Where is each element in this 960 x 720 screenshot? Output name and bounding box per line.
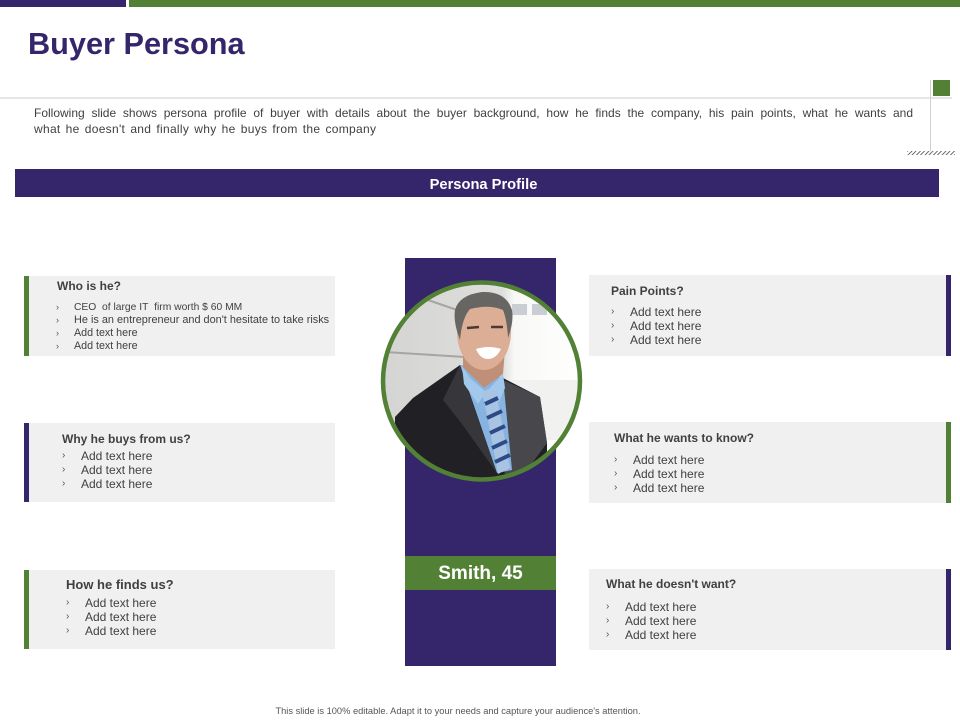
list: what he doesn't want: › <box>606 615 609 626</box>
list: pain points: Add text here <box>630 333 701 347</box>
corner accent: hatching <box>907 151 955 155</box>
description text <box>34 106 913 136</box>
list: who is he: › <box>56 302 59 312</box>
list: why he buys: › <box>62 464 65 475</box>
smile <box>476 347 501 359</box>
list: who is he: He is an entrepreneur and don't hesitate to take risks <box>74 314 329 326</box>
description text: Following slide shows persona profile of buyer with details about the buyer background, how he finds the company, his pain points, what he wants and <box>34 106 913 120</box>
list: who is he: › <box>56 328 59 338</box>
list: why he buys: › <box>62 478 65 489</box>
footer note: This slide is 100% editable. Adapt it to your needs and capture your audience's attention. <box>275 706 641 716</box>
section header: Persona Profile: Persona Profile <box>430 177 537 193</box>
panel: why he buys from us: Why he buys from us? <box>62 432 191 446</box>
list: why he buys: Add text here <box>81 463 152 477</box>
list: what he doesn't want: › <box>606 601 609 612</box>
list: who is he: Add text here <box>74 327 138 339</box>
list: how he finds us: › <box>66 625 69 636</box>
list: what he wants to know: Add text here <box>633 481 704 495</box>
list: pain points: › <box>611 306 614 317</box>
list: what he doesn't want <box>606 600 696 642</box>
eyes <box>467 327 503 328</box>
corner accent: green square <box>933 80 950 96</box>
list: who is he <box>56 302 329 352</box>
neck <box>463 356 504 388</box>
panel: what he wants to know: What he wants to know? <box>614 431 754 445</box>
list: pain points: › <box>611 320 614 331</box>
top bar: purple segment <box>0 0 126 7</box>
title: Buyer Persona <box>28 26 245 61</box>
section header: Persona Profile <box>15 169 939 197</box>
name banner: Smith, 45 <box>438 563 523 584</box>
list: pain points: › <box>611 334 614 345</box>
list: how he finds us: › <box>66 611 69 622</box>
list: how he finds us: Add text here <box>85 624 156 638</box>
panel: what he doesn't want: What he doesn't want? <box>606 577 736 591</box>
list: what he doesn't want: › <box>606 629 609 640</box>
panel: why he buys from us <box>24 423 335 502</box>
list: what he doesn't want: Add text here <box>625 628 696 642</box>
list: why he buys: › <box>62 450 65 461</box>
panel: who is he: Who is he? <box>57 279 121 293</box>
list: how he finds us: Add text here <box>85 610 156 624</box>
list: why he buys: Add text here <box>81 449 152 463</box>
head <box>457 306 511 370</box>
shirt <box>460 365 512 473</box>
list: who is he: Add text here <box>74 340 138 352</box>
list: what he doesn't want: Add text here <box>625 600 696 614</box>
list: pain points <box>611 305 701 347</box>
list: who is he: › <box>56 341 59 351</box>
collar <box>462 366 505 404</box>
tie <box>482 389 510 474</box>
center column <box>405 258 556 666</box>
list: why he buys <box>62 449 152 491</box>
list: what he doesn't want: Add text here <box>625 614 696 628</box>
list: pain points: Add text here <box>630 305 701 319</box>
hair <box>455 292 512 340</box>
list: how he finds us: Add text here <box>85 596 156 610</box>
panel: what he doesn't want <box>589 569 951 650</box>
name banner <box>405 556 556 590</box>
panel: who is he <box>24 276 335 356</box>
suit <box>395 365 547 490</box>
lapel <box>443 365 497 473</box>
portrait photo <box>380 280 582 482</box>
list: who is he: › <box>56 315 59 325</box>
list: what he wants to know: Add text here <box>633 467 704 481</box>
description text: what he doesn't and finally why he buys from the company <box>34 122 376 136</box>
list: what he wants to know: › <box>614 468 617 479</box>
list: why he buys: Add text here <box>81 477 152 491</box>
panel: what he wants to know <box>589 422 951 503</box>
panel: pain points: Pain Points? <box>611 284 684 298</box>
list: pain points: Add text here <box>630 319 701 333</box>
list: how he finds us <box>66 596 156 638</box>
panel: how he finds us <box>24 570 335 649</box>
list: how he finds us: › <box>66 597 69 608</box>
list: what he wants to know: Add text here <box>633 453 704 467</box>
list: what he wants to know: › <box>614 454 617 465</box>
panel: how he finds us: How he finds us? <box>66 577 174 592</box>
panel: pain points <box>589 275 951 356</box>
list: who is he: CEO of large IT firm worth $ 60 MM <box>74 302 242 313</box>
top bar: green segment <box>129 0 960 7</box>
list: what he wants to know: › <box>614 482 617 493</box>
list: what he wants to know <box>614 453 704 495</box>
